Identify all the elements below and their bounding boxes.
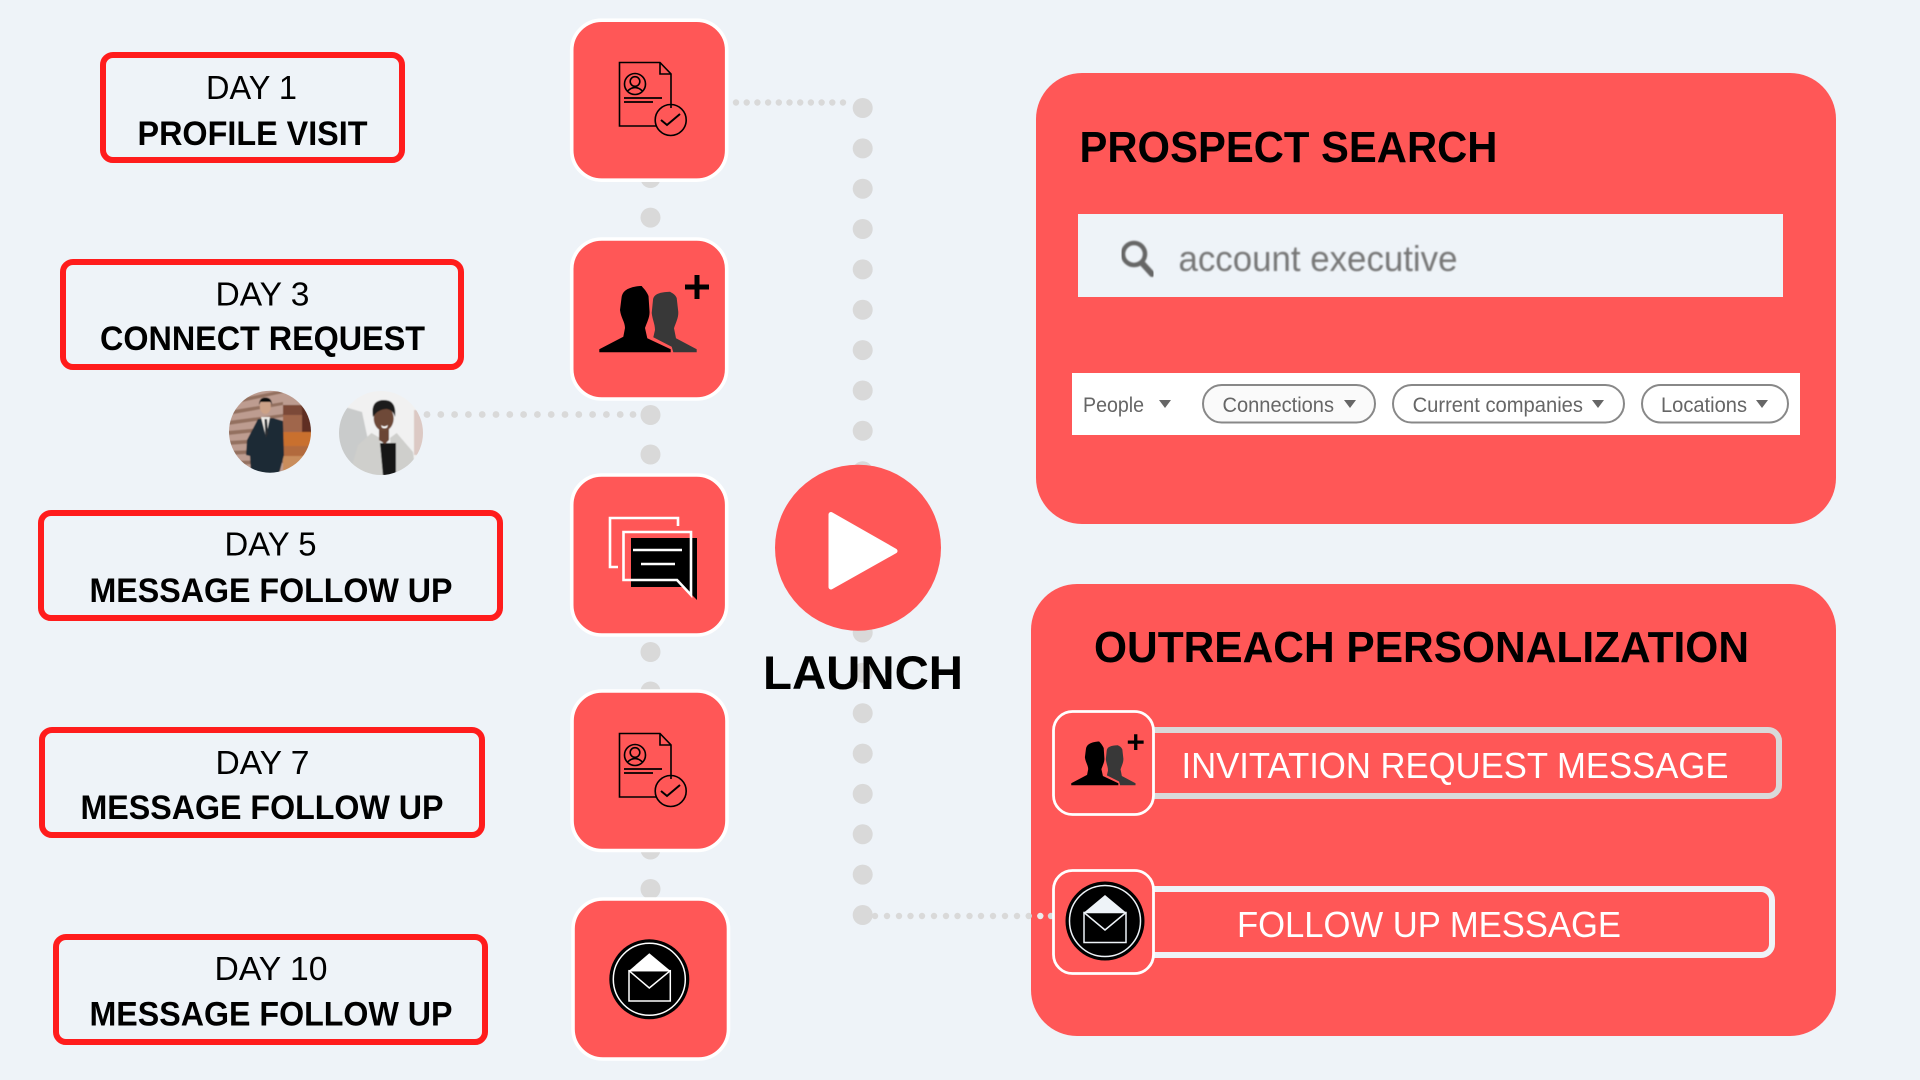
label: day 1 profile visit bbox=[103, 55, 402, 160]
icon tile: open envelope bbox=[1054, 870, 1154, 974]
message bar: invitation request: INVITATION REQUEST MESSAGE bbox=[1182, 745, 1728, 786]
label: day 5 message follow up: MESSAGE FOLLOW UP bbox=[90, 572, 452, 610]
filter pill: current companies bbox=[1393, 385, 1624, 422]
search box: account executive bbox=[1178, 238, 1458, 279]
panel: outreach personalization bbox=[872, 584, 1836, 1036]
heading: prospect search: PROSPECT SEARCH bbox=[1080, 123, 1498, 172]
filter pill: locations: Locations bbox=[1661, 394, 1747, 417]
label: day 10 message follow up bbox=[56, 937, 485, 1042]
icon: profile document with check bbox=[620, 734, 686, 806]
filter pill: current companies: Current companies bbox=[1413, 394, 1583, 417]
icon tile: add people bbox=[1054, 712, 1154, 814]
icon: chat bubbles bbox=[610, 518, 697, 600]
dotted connector: profile visit to centre line bbox=[733, 99, 846, 106]
panel: prospect search bbox=[1036, 73, 1836, 524]
label: day 7 message follow up: DAY 7 bbox=[216, 744, 310, 781]
dotted connector: centre timeline bbox=[853, 98, 873, 925]
label: day 3 connect request: CONNECT REQUEST bbox=[100, 320, 425, 358]
label: day 5 message follow up: DAY 5 bbox=[224, 526, 316, 562]
tile: message follow up day 10 bbox=[573, 899, 728, 1059]
dotted connector: left timeline bbox=[640, 168, 660, 899]
launch label: LAUNCH bbox=[763, 646, 963, 699]
photo: male prospect bbox=[228, 390, 313, 474]
tile: connect request bbox=[572, 239, 727, 399]
label: day 3 connect request bbox=[63, 262, 461, 367]
label: day 3 connect request: DAY 3 bbox=[216, 276, 310, 312]
search box bbox=[1078, 214, 1783, 297]
icon: add people bbox=[599, 275, 709, 352]
message bar: invitation request bbox=[1130, 730, 1779, 796]
tile: message follow up day 5 bbox=[572, 475, 727, 635]
icon: open envelope bbox=[609, 939, 689, 1019]
label: day 10 message follow up: MESSAGE FOLLOW UP bbox=[90, 996, 452, 1034]
label: day 10 message follow up: DAY 10 bbox=[214, 950, 328, 987]
dotted connector: follow up to centre line bbox=[872, 913, 1054, 919]
filter pill: connections bbox=[1203, 385, 1375, 422]
message bar: follow up bbox=[1130, 889, 1772, 955]
photo: female prospect bbox=[339, 399, 423, 475]
icon: magnifier bbox=[1123, 243, 1152, 274]
tile: message follow up day 7 bbox=[572, 691, 727, 850]
label: day 1 profile visit: PROFILE VISIT bbox=[138, 115, 368, 153]
message bar: follow up: FOLLOW UP MESSAGE bbox=[1237, 904, 1621, 945]
dotted connector: prospects to timeline bbox=[424, 411, 636, 418]
heading: outreach personalization: OUTREACH PERSONALIZATION bbox=[1094, 623, 1749, 672]
label: day 1 profile visit: DAY 1 bbox=[206, 69, 297, 106]
label: day 7 message follow up: MESSAGE FOLLOW UP bbox=[80, 789, 444, 827]
filter pill: locations bbox=[1642, 385, 1788, 422]
label: day 7 message follow up bbox=[42, 730, 482, 835]
filter bar bbox=[1072, 373, 1800, 435]
filter pill: connections: Connections bbox=[1222, 394, 1334, 417]
label: day 5 message follow up bbox=[41, 513, 500, 618]
filter bar: People bbox=[1083, 394, 1144, 417]
launch play button bbox=[775, 465, 941, 631]
icon: profile document with check bbox=[620, 62, 686, 136]
tile: profile visit bbox=[572, 20, 727, 180]
